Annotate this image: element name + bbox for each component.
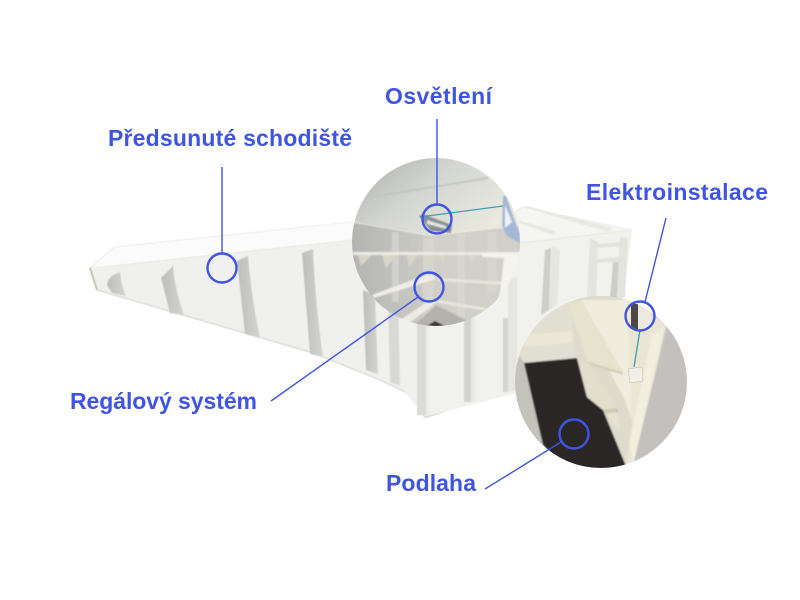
roof with rails — [515, 207, 632, 243]
rear walls — [352, 222, 430, 312]
vertical pillars on end wall — [417, 237, 628, 415]
cable — [634, 330, 640, 367]
wall ribs — [107, 249, 400, 386]
reflector — [502, 196, 520, 243]
top inner face of stair — [90, 212, 520, 268]
top shelf — [353, 252, 520, 255]
shelf brackets — [358, 254, 474, 268]
long side wall — [90, 238, 520, 417]
right wall — [634, 326, 687, 462]
back shelf — [526, 332, 572, 346]
upper wall steps — [582, 300, 632, 420]
label: Elektroinstalace: Elektroinstalace — [586, 179, 768, 205]
marker circles — [208, 204, 654, 448]
left wall — [515, 356, 544, 446]
lamp — [419, 214, 452, 233]
front end wall — [425, 230, 632, 417]
label: Předsunuté schodiště: Předsunuté schodiště — [108, 125, 352, 151]
infographic diagram — [72, 86, 768, 491]
lower shelves — [402, 301, 437, 322]
middle shelves — [372, 275, 436, 298]
label: Podlaha: Podlaha — [386, 470, 476, 496]
ladder rungs — [597, 242, 622, 263]
junction box — [628, 367, 643, 383]
stair end edge — [90, 268, 97, 290]
underside block — [405, 385, 445, 418]
bright opening — [482, 254, 519, 298]
label: Osvětlení: Osvětlení — [385, 83, 494, 109]
container photo — [90, 206, 632, 418]
top shelf — [586, 309, 622, 372]
dark floor — [524, 358, 626, 472]
ceiling — [366, 159, 518, 235]
electrical box top — [631, 304, 638, 329]
back wall — [515, 300, 577, 363]
cyan cable — [420, 206, 503, 217]
inset circle: floor and wiring — [512, 295, 692, 475]
inset circle: interior with lighting and shelves — [350, 155, 525, 330]
second shelf — [576, 359, 602, 410]
floor opening — [416, 305, 466, 326]
label: Regálový systém: Regálový systém — [70, 388, 257, 414]
vertical ribs — [392, 232, 430, 315]
pointer lines — [222, 119, 666, 489]
wall column — [625, 300, 666, 470]
lower edge — [97, 290, 405, 392]
